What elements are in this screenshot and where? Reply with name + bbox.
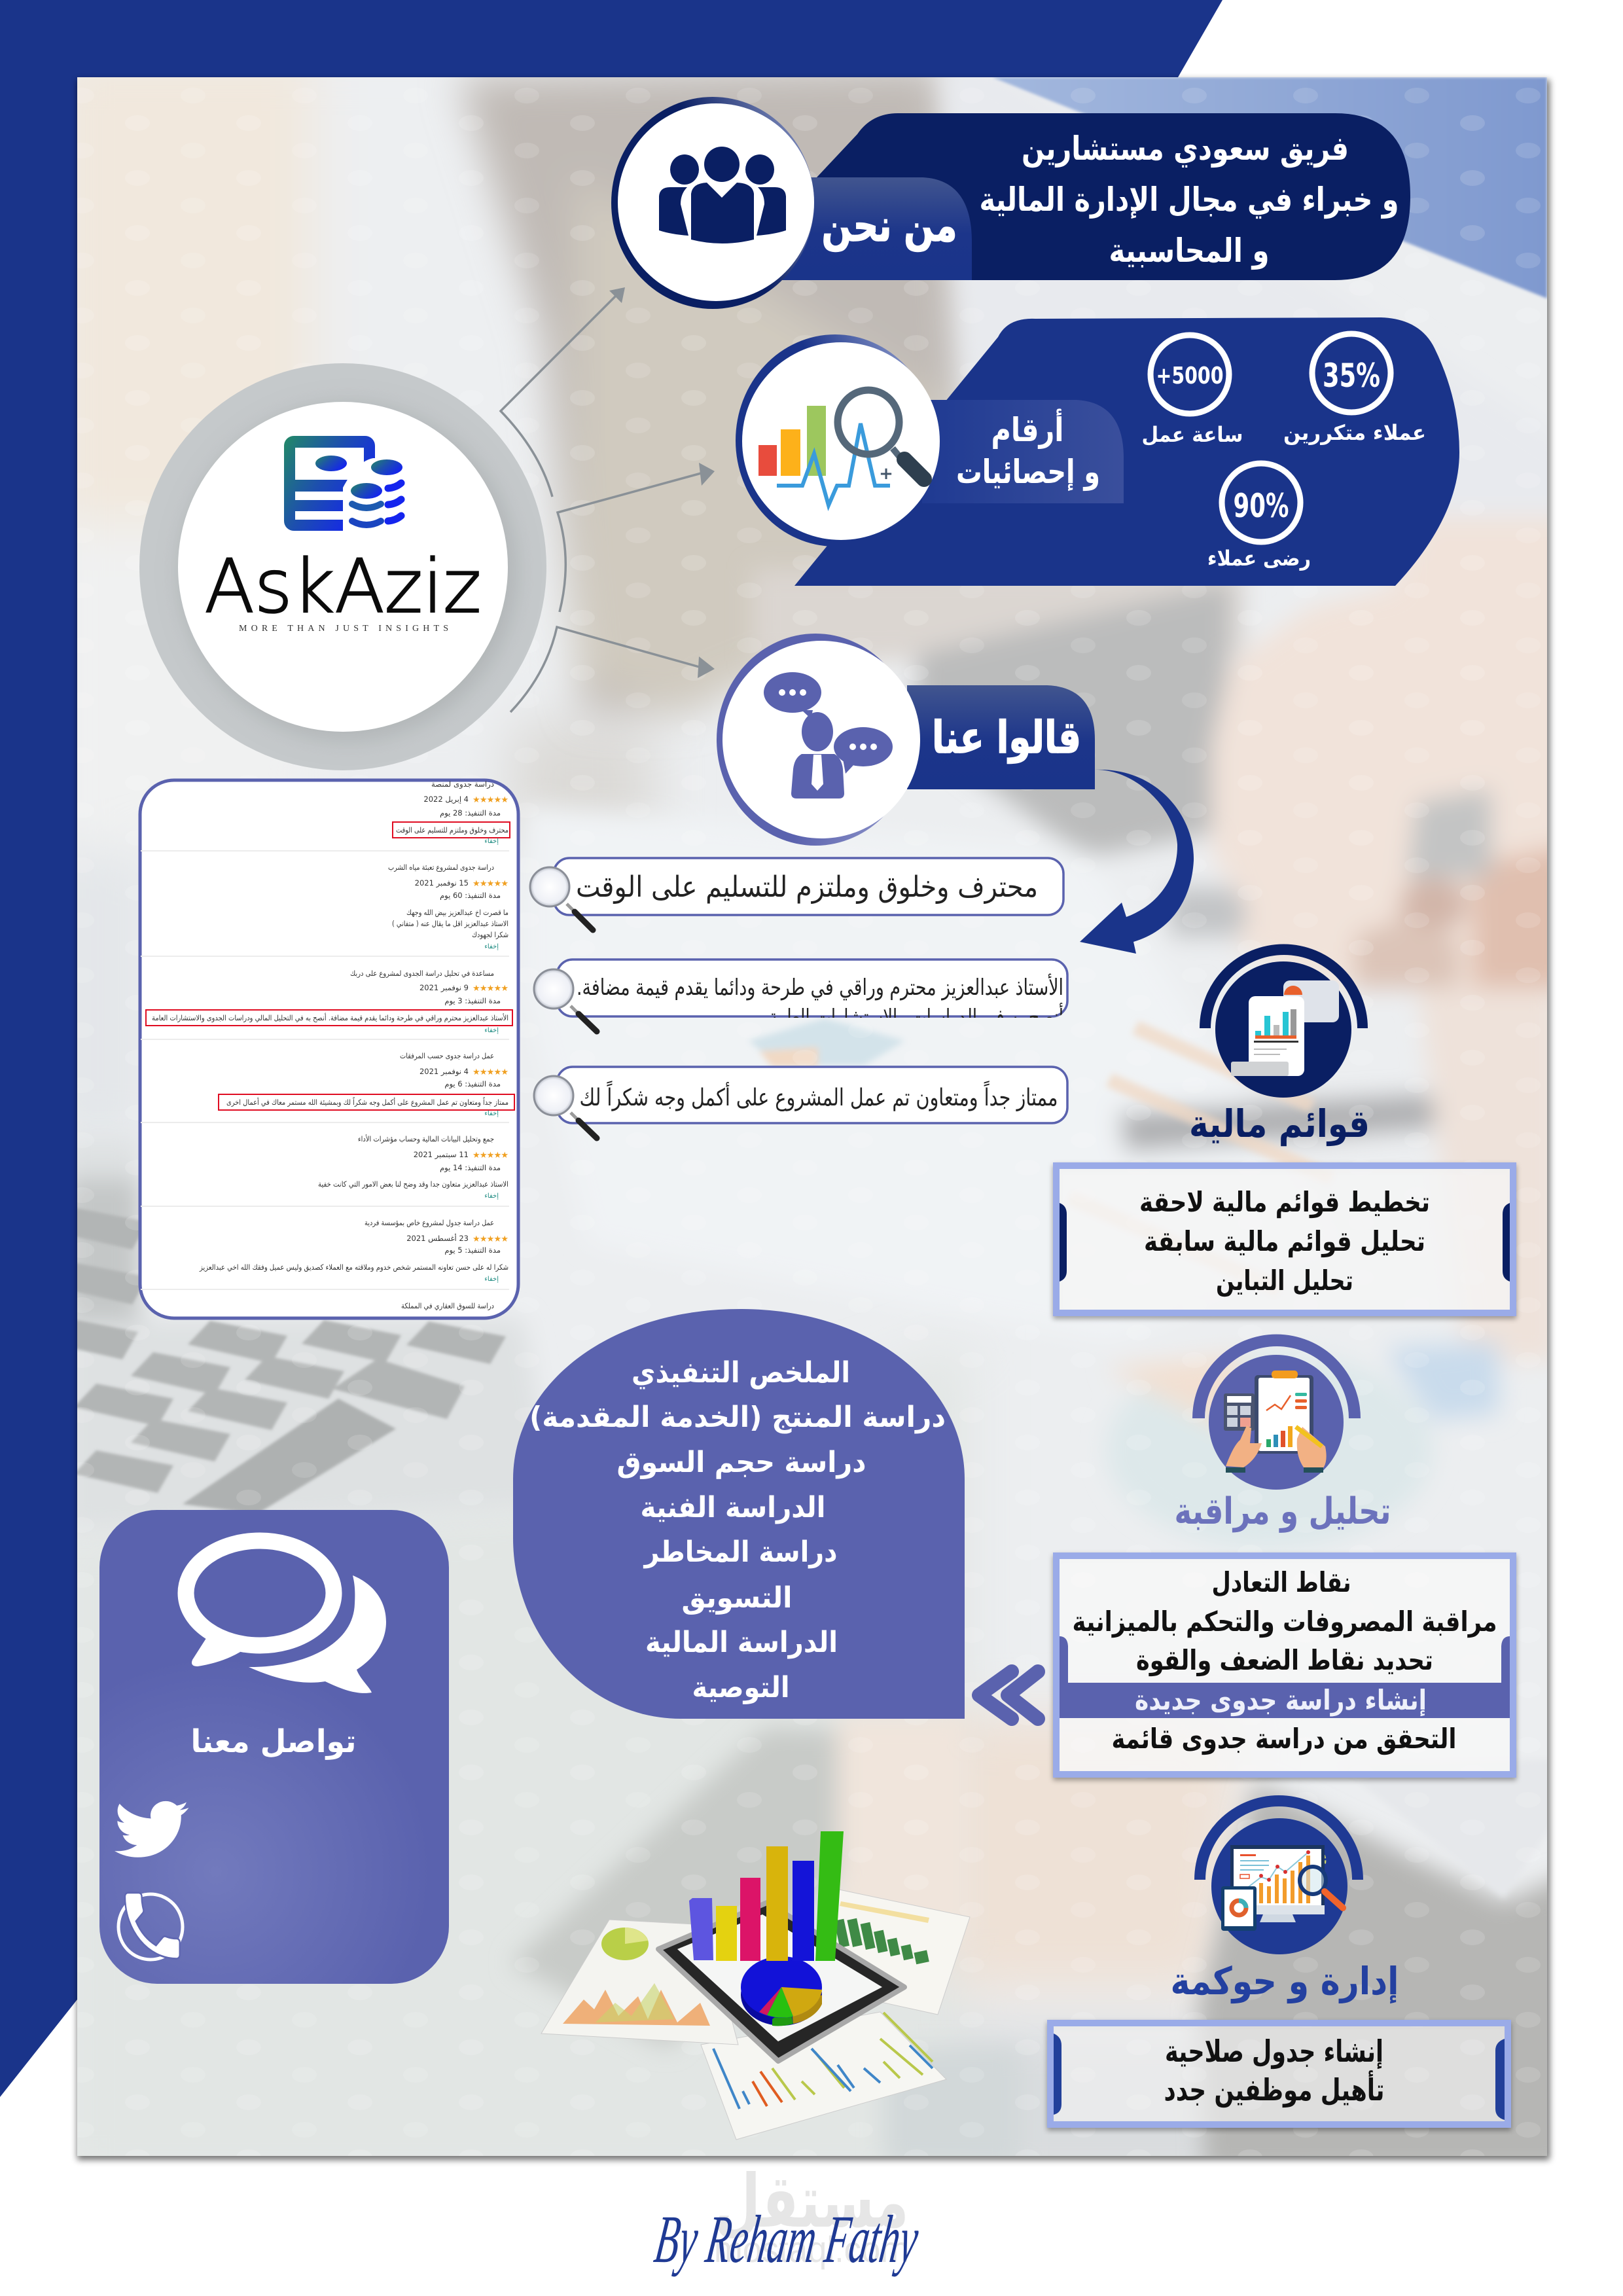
reviews screenshot: 11 سبتمبر 2021: [414, 1150, 469, 1160]
reviews screenshot: الأستاذ عبدالعزيز محترم وراقي في طرحة ودائما يقدم قيمة مضافة. أنصح به في التحليل المالي ودراسات الجدوى والاستشارات العامة: [152, 1013, 508, 1023]
icon: chart and magnifier in circle: +: [879, 464, 893, 484]
reviews screenshot: ما قصرت اخ عبدالعزيز بيض الله وجهك: [406, 908, 508, 918]
watermark: مستقل: [715, 2159, 908, 2244]
reviews screenshot: مدة التنفيذ: 5 يوم: [444, 1246, 501, 1255]
signature: By Reham Fathy: [651, 2201, 923, 2277]
contact heading: تواصل معنا: [191, 1723, 356, 1760]
box: governance list: [1050, 2023, 1508, 2125]
icon: magnifier: [534, 1076, 597, 1138]
reviews screenshot: ★★★★★: [473, 1067, 508, 1077]
arrow: to testimonials section: [510, 627, 715, 712]
reviews screenshot: دراسة للسوق العقاري في المملكة: [401, 1301, 494, 1311]
box: financial statements list: [1056, 1166, 1513, 1313]
about ribbon: [779, 113, 1410, 280]
stat: returning clients 35%: [1283, 334, 1426, 445]
feasibility study contents: دراسة المخاطر: [643, 1535, 838, 1569]
box: analysis and monitoring list: التحقق من دراسة جدوى قائمة: [1111, 1723, 1457, 1755]
box: financial statements list: تحليل قوائم مالية سابقة: [1144, 1225, 1425, 1258]
reviews screenshot: ★★★★★: [473, 1234, 508, 1244]
hand shape: [1212, 517, 1571, 988]
stats heading: أرقام: [991, 408, 1064, 449]
curved arrow down to services: [1080, 770, 1194, 954]
section: numbers and stats: [736, 317, 1459, 586]
paper with pie and area chart: [541, 1920, 738, 2045]
reviews screenshot: [140, 780, 518, 1318]
box: analysis and monitoring list: إنشاء دراسة جدوى جديدة: [1135, 1684, 1427, 1717]
reviews screenshot: الاستاذ عبدالعزيز متعاون جدا وقد وضح لنا بعض الامور التي كانت خفية: [318, 1179, 508, 1189]
box: governance list: إنشاء جدول صلاحية: [1165, 2034, 1383, 2070]
box: financial statements list: تحليل التباين: [1216, 1265, 1353, 1297]
reviews screenshot: شكرا لجهودك: [472, 930, 508, 940]
arrow: to about section: [501, 287, 625, 497]
arrow: to numbers section: [558, 463, 715, 612]
reviews screenshot: إخفاء: [484, 1110, 499, 1117]
quote 3: ممتاز جداً ومتعاون تم عمل المشروع على أكمل وجه شكراً لك: [580, 1081, 1058, 1111]
feasibility study contents: التوصية: [692, 1671, 789, 1704]
testimonials heading text: قالوا عنا: [932, 712, 1081, 764]
about text: فريق سعودي مستشارين: [1022, 130, 1349, 168]
contact card: [99, 1510, 449, 1984]
feasibility study contents: دراسة المنتج (الخدمة المقدمة): [529, 1401, 946, 1434]
reviews screenshot: 4 إبريل 2022: [423, 795, 469, 804]
reviews screenshot: دراسة جدوى لمشروع تعبئة مياه الشرب: [388, 863, 494, 872]
icon: speaker with speech bubbles: [717, 634, 920, 846]
stat: satisfaction 90%: [1207, 463, 1311, 571]
heading: analysis and monitoring: تحليل و مراقبة: [1174, 1490, 1391, 1533]
heading: financial statements: قوائم مالية: [1189, 1102, 1370, 1147]
reviews screenshot: ممتاز جداً ومتعاون تم عمل المشروع على أكمل وجه شكراً لك وبمشيئة الله مستمر معاك في أعمال اخرى: [226, 1096, 508, 1107]
reviews screenshot: 15 نوفمبر 2021: [415, 878, 469, 888]
reviews screenshot: إخفاء: [484, 838, 499, 845]
icon: phone: [118, 1893, 183, 1960]
reviews screenshot: جمع وتحليل البيانات المالية وحساب مؤشرات الأداء: [358, 1134, 494, 1144]
watermark: mostaql.com: [714, 2229, 909, 2270]
blue corner frame: [0, 0, 1222, 2097]
feasibility study contents: الدراسة الفنية: [640, 1491, 826, 1524]
3D bars: [689, 1831, 844, 1961]
illustration: tablet with 3D charts: [541, 1831, 970, 2140]
reviews screenshot: محترف وخلوق وملتزم للتسليم على الوقت: [396, 825, 508, 835]
testimonials heading tab: [907, 685, 1095, 789]
watermark: [714, 2159, 909, 2270]
logo tagline: MORE THAN JUST INSIGHTS: [239, 624, 448, 634]
stat: returning clients 35%: عملاء متكررين: [1283, 420, 1426, 445]
tablet: [658, 1903, 904, 2061]
quote 1: محترف وخلوق وملتزم للتسليم على الوقت: [576, 870, 1038, 904]
stat: satisfaction 90%: 90%: [1233, 487, 1289, 525]
reviews screenshot: ★★★★★: [473, 795, 508, 805]
reviews screenshot: إخفاء: [484, 1276, 499, 1283]
icon: speech bubbles: [186, 1541, 386, 1693]
about text: و المحاسبية: [1109, 232, 1270, 270]
quote 2: الأستاذ عبدالعزيز محترم وراقي في طرحة ودائما يقدم قيمة مضافة.: [577, 973, 1063, 1001]
icon: monitor dashboard: [1194, 1795, 1363, 1954]
stat: returning clients 35%: 35%: [1323, 357, 1380, 395]
section: about us: [611, 97, 1410, 309]
box: analysis and monitoring list: مراقبة المصروفات والتحكم بالميزانية: [1072, 1605, 1497, 1638]
feasibility study contents: دراسة حجم السوق: [616, 1446, 866, 1479]
logo wordmark: AskAziz: [204, 545, 482, 630]
reviews screenshot: إخفاء: [484, 1027, 499, 1034]
feasibility study contents: الملخص التنفيذي: [632, 1356, 850, 1390]
quote 2: [534, 960, 1067, 1031]
feasibility study contents: التسويق: [682, 1581, 792, 1615]
section: testimonials heading: [717, 634, 1095, 846]
box: analysis and monitoring list: [1056, 1556, 1513, 1774]
reviews screenshot: عمل دراسة جدوى حسب المرفقات: [400, 1051, 494, 1061]
stats heading: و إحصائيات: [956, 453, 1100, 492]
feasibility study contents: الدراسة المالية: [645, 1626, 838, 1659]
reviews screenshot: عمل دراسة جدول لمشروع خاص بمؤسسة فردية: [365, 1218, 494, 1228]
icon: financial statements: [1200, 944, 1368, 1098]
reviews screenshot: شكرا له على حسن تعاونه المستمر شخص خدوم وملاقته مع العملاء كصديق وليس عميل وفقك الله اخي عبدالعزيز: [199, 1263, 508, 1272]
about heading: من نحن: [822, 200, 957, 252]
reviews screenshot: دراسة جدوى لمنصة: [431, 780, 494, 789]
reviews screenshot: إخفاء: [484, 943, 499, 950]
logo circle: [139, 363, 546, 770]
box: analysis and monitoring list: نقاط التعادل: [1212, 1566, 1351, 1598]
icon: twitter: [115, 1801, 188, 1857]
box: financial statements list: تخطيط قوائم مالية لاحقة: [1139, 1186, 1430, 1219]
box: governance list: تأهيل موظفين جدد: [1164, 2070, 1385, 2108]
reviews screenshot: مدة التنفيذ: 28 يوم: [440, 808, 501, 818]
feasibility study contents: [513, 1309, 965, 1719]
icon: chart and magnifier in circle: [736, 334, 940, 547]
reviews screenshot: مدة التنفيذ: 14 يوم: [440, 1163, 501, 1173]
pie chart 3D: [741, 1956, 822, 2026]
quote 3: [534, 1067, 1067, 1138]
reviews screenshot: 23 أغسطس 2021: [406, 1233, 469, 1244]
icon: analysis clipboard: [1192, 1335, 1361, 1490]
paper with green bars: [825, 1890, 970, 2015]
connector lines with arrows: [501, 287, 715, 712]
reviews screenshot: ★★★★★: [473, 879, 508, 889]
stats heading: [956, 408, 1100, 492]
reviews screenshot: إخفاء: [484, 1193, 499, 1200]
quote 2: أنصح به في الدراسات والاستشارات العامة: [769, 1003, 1063, 1031]
stat: work hours +5000: [1141, 335, 1243, 447]
stat: work hours +5000: ساعة عمل: [1141, 422, 1243, 447]
reviews screenshot: الاستاذ عبدالعزيز اقل ما يقال عنه ( متفاني ): [392, 919, 508, 929]
icon: logo document and coins: [284, 436, 409, 533]
box: analysis and monitoring list: تحديد نقاط الضعف والقوة: [1136, 1644, 1433, 1677]
about heading tab: [776, 177, 972, 280]
icon: magnifier: [530, 867, 593, 930]
stat: satisfaction 90%: رضى عملاء: [1207, 546, 1311, 571]
reviews screenshot: 4 نوفمبر 2021: [419, 1067, 469, 1077]
double chevron arrow: [979, 1672, 1038, 1719]
paper with bar chart: [701, 2012, 946, 2140]
reviews screenshot: 9 نوفمبر 2021: [419, 983, 469, 993]
reviews screenshot: مدة التنفيذ: 3 يوم: [444, 996, 501, 1006]
reviews screenshot: ★★★★★: [473, 984, 508, 994]
quote 1: [530, 858, 1063, 930]
icon: magnifier: [534, 969, 597, 1031]
stats heading tab: [922, 400, 1124, 503]
heading: management and governance: إدارة و حوكمة: [1170, 1959, 1399, 2004]
icon: team in circle: [611, 97, 814, 309]
reviews screenshot: مدة التنفيذ: 60 يوم: [440, 891, 501, 901]
about text: و خبراء في مجال الإدارة المالية: [979, 181, 1399, 219]
stats ribbon: [794, 317, 1459, 586]
reviews screenshot: مساعدة في تحليل دراسة الجدوى لمشروع على دربك: [350, 969, 494, 978]
stat: work hours +5000: +5000: [1156, 363, 1224, 389]
about text: [979, 130, 1399, 270]
reviews screenshot: مدة التنفيذ: 6 يوم: [444, 1079, 501, 1089]
reviews screenshot: ★★★★★: [473, 1151, 508, 1160]
